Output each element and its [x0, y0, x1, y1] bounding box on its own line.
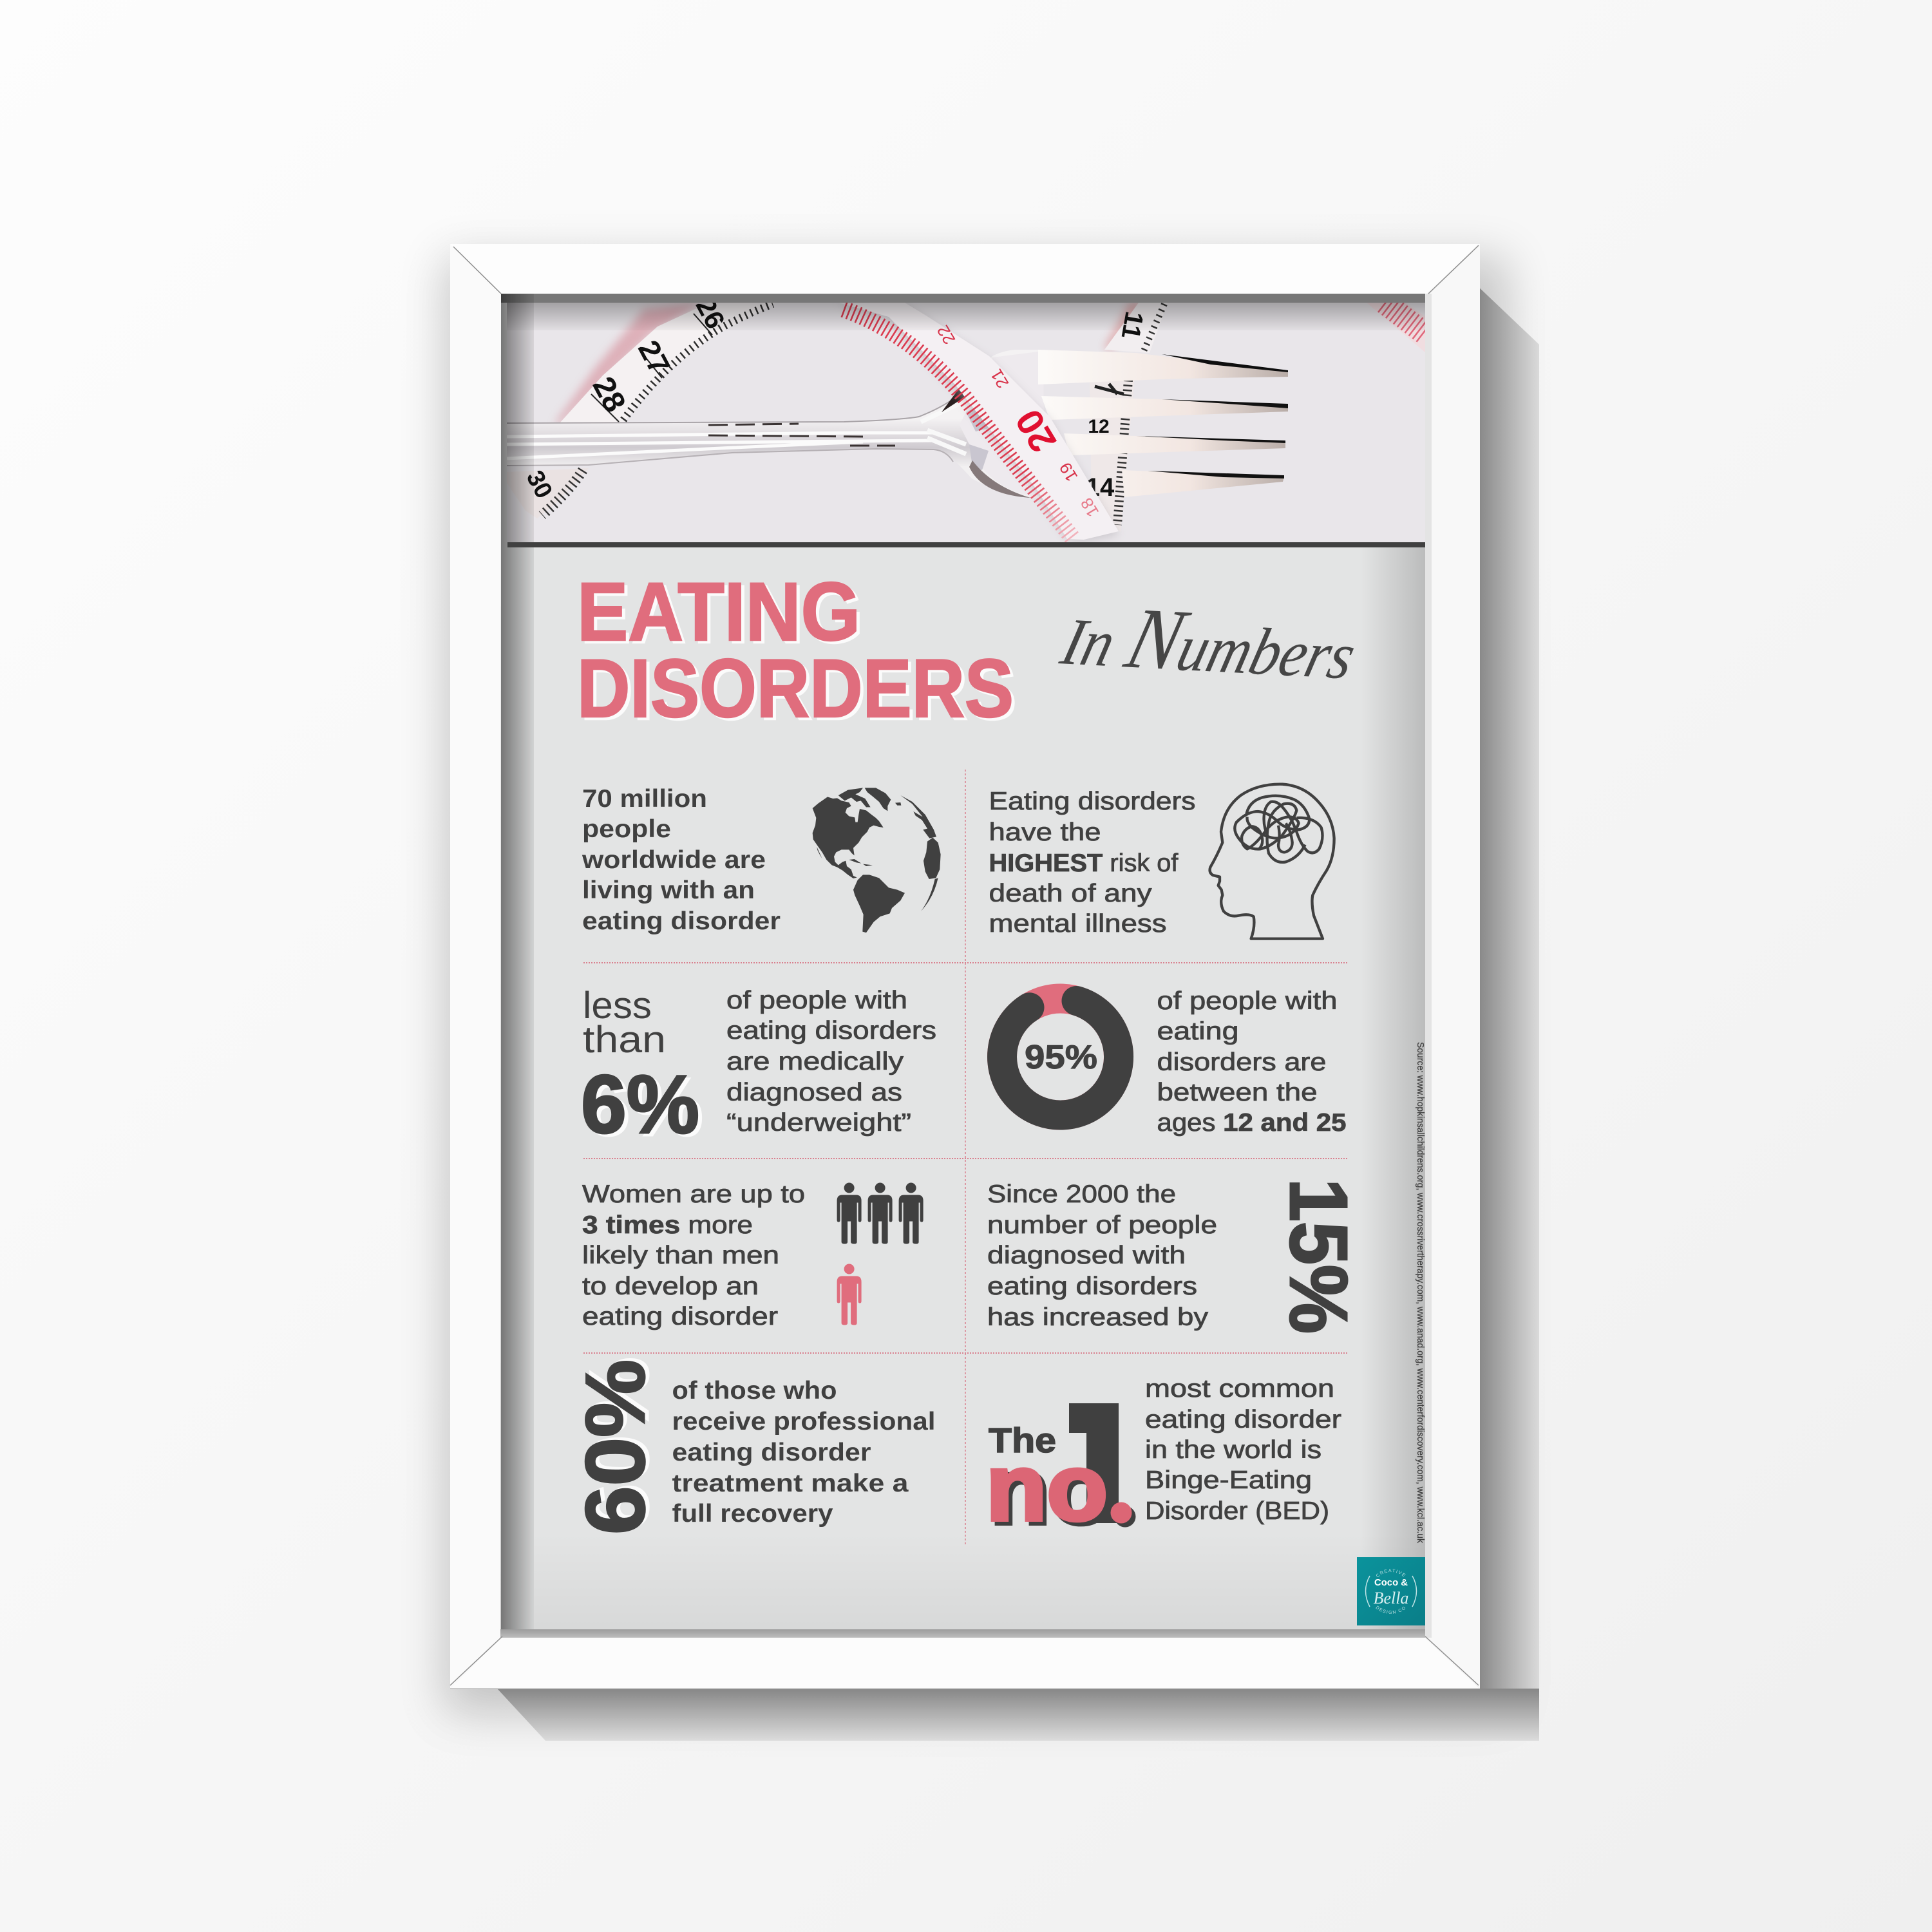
photo: fork and measuring tape: 22 [933, 322, 959, 348]
text: women 3 times more likely [582, 1180, 805, 1331]
text: 70 million people: people [582, 815, 671, 843]
icon: three dark figures [837, 1182, 923, 1244]
text: highest risk of death: Eating disorders [989, 788, 1195, 815]
text: medically underweight: are medically [726, 1048, 904, 1075]
text: medically underweight: eating disorders [726, 1017, 936, 1045]
icon: head with tangled brain [1210, 784, 1334, 939]
white picture frame [450, 244, 1480, 1689]
text: binge-eating disorder: in the world is [1145, 1436, 1321, 1464]
stat: the no. 1: no [986, 1435, 1108, 1540]
stat: 60% rotated: 60% [568, 1359, 662, 1535]
logo: coco and bella: Bella [1374, 1589, 1408, 1607]
stat: the no. 1 [988, 1403, 1136, 1528]
title: eating disorders: DISORDERS [577, 643, 1014, 735]
photo: fork and measuring tape [507, 293, 1426, 542]
poster [501, 294, 1426, 1629]
text: binge-eating disorder: Binge-Eating [1145, 1466, 1312, 1494]
text: highest risk of death: have the [989, 819, 1101, 846]
photo: fork and measuring tape: 30 [521, 466, 558, 503]
text: ages 12 and 25: disorders are [1157, 1048, 1327, 1076]
text: binge-eating disorder: most common [1145, 1375, 1334, 1403]
text: since 2000: number of people [987, 1211, 1217, 1239]
text: full recovery: eating disorder [672, 1439, 871, 1466]
text: women 3 times more likely: to develop an [582, 1273, 759, 1300]
panel: 60% recovery [568, 1357, 935, 1535]
text: full recovery: full recovery [672, 1500, 833, 1528]
subtitle: in numbers: In Numbers [1052, 586, 1368, 697]
stat: the no. 1: 1 [1025, 1325, 1168, 1613]
text: highest risk of death: death of any [989, 880, 1152, 907]
title: eating disorders: EATING [577, 566, 860, 658]
photo: fork and measuring tape: 14 [1086, 473, 1115, 502]
icon: pink figure [837, 1264, 862, 1325]
icon: globe [813, 788, 941, 933]
photo: fork and measuring tape: 27 [632, 335, 677, 379]
text: women 3 times more likely: 3 times more [582, 1211, 753, 1239]
text: since 2000: Since 2000 the [987, 1180, 1176, 1208]
logo: coco and bella: DESIGN CO [1376, 1605, 1405, 1614]
text: 70 million people: worldwide are [582, 846, 766, 874]
text: medically underweight: of people with [726, 987, 907, 1014]
text: since 2000 [987, 1180, 1217, 1331]
text: full recovery: receive professional [672, 1408, 935, 1435]
text: highest risk of death: mental illness [989, 910, 1167, 938]
title: eating disorders: EATING [580, 569, 864, 661]
text: highest risk of death: HIGHEST risk of [989, 849, 1179, 877]
text: women 3 times more likely: likely than men [582, 1242, 779, 1269]
photo: fork and measuring tape: 26 [690, 293, 731, 334]
stat: less than [583, 985, 666, 1061]
photo: fork and measuring tape: 11 [1116, 309, 1148, 341]
text: full recovery: treatment make a [672, 1470, 909, 1497]
stat: less than: than [583, 1019, 666, 1061]
text: since 2000: diagnosed with [987, 1242, 1186, 1269]
text: 70 million people: living with an [582, 876, 755, 904]
grid dividers [583, 770, 1347, 1546]
text: ages 12 and 25: eating [1157, 1018, 1239, 1045]
frame shadow [444, 258, 1539, 1741]
logo: coco and bella: CREATIVE [1376, 1569, 1405, 1577]
source note: Source: www.hopkinsallchildrens.org, www.crossrivertherapy.com, www.anad.org, www.centerfordiscovery.com, www.kcl.ac.uk [1415, 1042, 1426, 1543]
panel: 70 million [582, 785, 941, 935]
text: ages 12 and 25: ages 12 and 25 [1157, 1109, 1346, 1137]
photo: fork and measuring tape: 18 [1077, 495, 1103, 520]
text: medically underweight [726, 987, 936, 1137]
text: ages 12 and 25: of people with [1157, 987, 1337, 1015]
panel: 95% [1002, 987, 1346, 1137]
text: medically underweight: diagnosed as [726, 1079, 902, 1106]
logo: coco and bella [1357, 1557, 1425, 1625]
inner frame shadows [501, 294, 1426, 1629]
photo: fork and measuring tape: 12 [1088, 416, 1110, 437]
photo: fork and measuring tape: 20 [1007, 402, 1065, 459]
title: eating disorders [577, 566, 1017, 737]
photo: fork and measuring tape: 19 [1056, 459, 1081, 485]
photo: fork and measuring tape: 21 [987, 366, 1012, 392]
stat: the no. 1: The [989, 1421, 1056, 1460]
text: since 2000: eating disorders [987, 1273, 1197, 1300]
text: ages 12 and 25 [1157, 987, 1346, 1137]
panel: women 3 times [582, 1180, 923, 1331]
text: full recovery: of those who [672, 1377, 837, 1405]
panel: since 2000 15% [987, 1179, 1364, 1334]
logo: coco and bella: Coco & [1374, 1577, 1408, 1588]
text: highest risk of death [989, 788, 1195, 938]
stat: 6%: 6% [581, 1059, 699, 1151]
text: medically underweight: “underweight” [726, 1109, 911, 1137]
panel: highest risk [989, 784, 1334, 939]
stat: 60% rotated: 60% [572, 1357, 666, 1532]
stat: 6%: 6% [585, 1061, 703, 1153]
text: since 2000: has increased by [987, 1303, 1209, 1331]
text: 70 million people [582, 785, 781, 935]
text: women 3 times more likely: Women are up to [582, 1180, 805, 1208]
stat: the no. 1: no [990, 1439, 1112, 1544]
title: eating disorders: DISORDERS [580, 645, 1017, 737]
text: binge-eating disorder [1145, 1375, 1341, 1525]
text: full recovery [672, 1377, 935, 1528]
text: women 3 times more likely: eating disorder [582, 1303, 778, 1331]
panel: less than 6% [581, 985, 936, 1153]
stat: less than: less [583, 985, 652, 1027]
poster background [501, 294, 1426, 1629]
text: ages 12 and 25: between the [1157, 1079, 1318, 1106]
photo: fork and measuring tape: 28 [586, 372, 632, 418]
stat: the no. 1: . [1117, 1485, 1128, 1528]
text: 70 million people: eating disorder [582, 907, 781, 935]
text: 70 million people: 70 million [582, 785, 707, 813]
stat: 15% rotated: 15% [1273, 1179, 1364, 1334]
panel: the no.1 [988, 1381, 1341, 1528]
text: binge-eating disorder: eating disorder [1145, 1406, 1341, 1434]
chart: donut 95% [1002, 998, 1119, 1115]
dark divider bar [507, 542, 1426, 547]
text: binge-eating disorder: Disorder (BED) [1145, 1497, 1329, 1525]
chart: donut 95%: 95% [1025, 1039, 1097, 1076]
